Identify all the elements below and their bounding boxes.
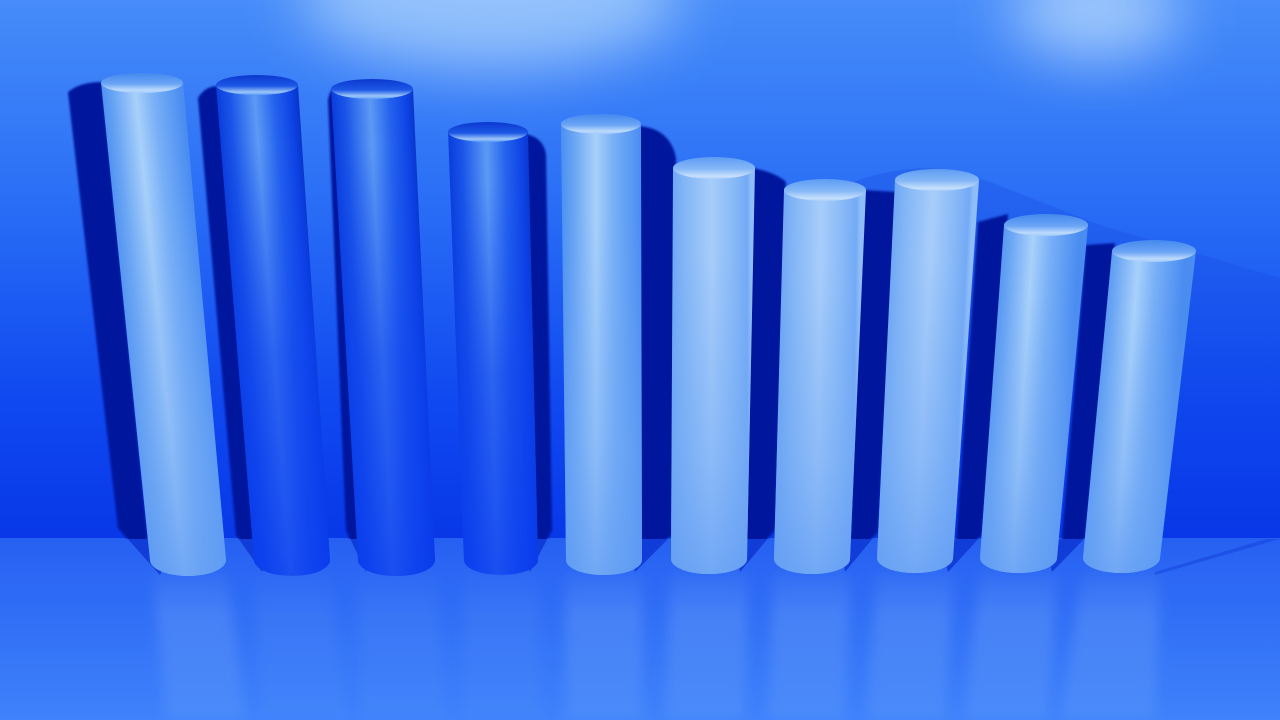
cylinder 3 — [331, 79, 435, 576]
floor — [0, 538, 1280, 720]
cylinder 9 — [980, 214, 1088, 573]
floor reflections — [153, 572, 1160, 720]
cast shadows on the floor — [128, 539, 1279, 575]
cylinder 8 — [877, 169, 979, 573]
cylinder 5 — [561, 114, 642, 575]
cylinder 7 — [774, 179, 866, 574]
cylinder 6 — [671, 157, 755, 574]
cylinder 1 — [101, 73, 226, 576]
cylinder 4 — [448, 122, 538, 575]
soft wall shadow on right — [850, 168, 1280, 540]
cylinder 2 — [216, 75, 330, 576]
wall light glow centre — [300, 0, 680, 70]
cast shadows on the wall — [68, 82, 1115, 565]
wall light glow right — [1010, 0, 1180, 60]
cylinder 10 — [1083, 240, 1196, 573]
wall background — [0, 0, 1280, 540]
